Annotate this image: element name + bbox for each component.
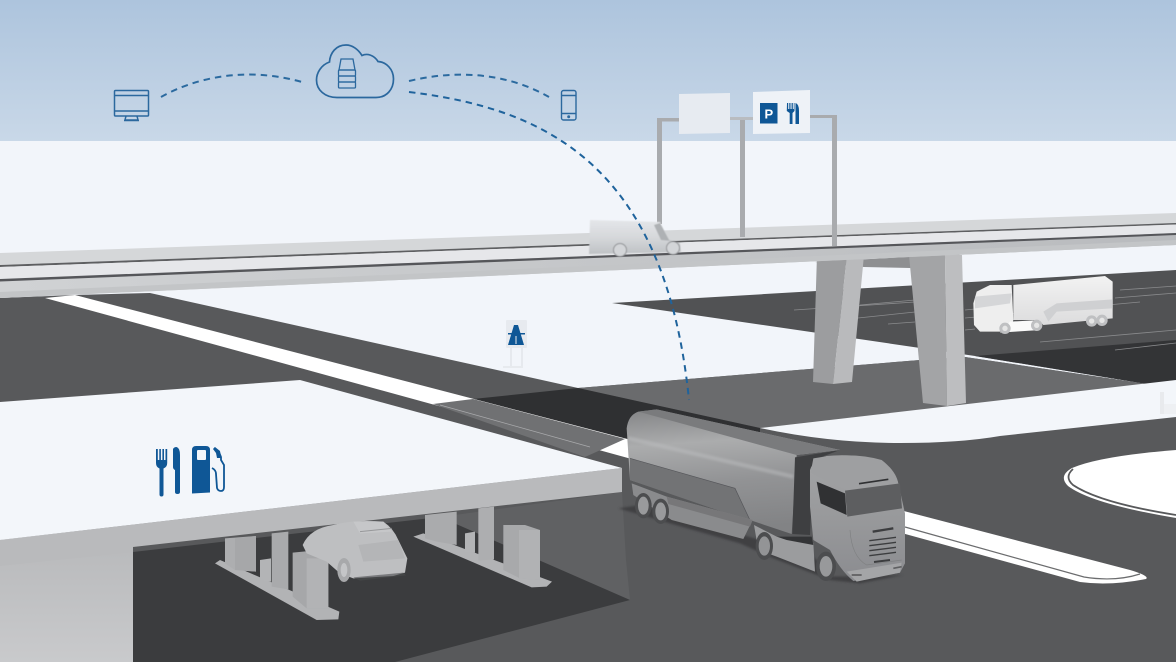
fuel pump bbox=[192, 446, 224, 494]
drive wheel bbox=[756, 532, 773, 560]
service station canopy bbox=[0, 380, 630, 662]
under-bridge beam bbox=[815, 254, 962, 268]
rear wheels bbox=[635, 493, 669, 524]
very dark shadow section bbox=[473, 388, 760, 474]
trailer bbox=[627, 409, 840, 534]
white island right bbox=[1064, 450, 1176, 518]
area under canopy beyond pad bbox=[440, 492, 630, 600]
icon: cloud with server bbox=[316, 45, 394, 98]
knife bbox=[173, 447, 180, 494]
trailer skirt bbox=[632, 483, 753, 539]
posts bbox=[657, 115, 837, 246]
white lane median bbox=[45, 295, 1147, 583]
canopy fascia bbox=[0, 468, 622, 566]
far truck bbox=[973, 276, 1113, 334]
gantry sign structure bbox=[657, 90, 837, 246]
windshield bbox=[845, 483, 902, 517]
white island upper right bbox=[760, 380, 1176, 443]
left wall bbox=[0, 525, 133, 662]
icon: computer monitor bbox=[114, 90, 148, 120]
main truck bbox=[618, 409, 905, 583]
side window bbox=[817, 482, 847, 515]
far parking road bbox=[612, 270, 1176, 384]
dark forecourt pad bbox=[133, 517, 630, 662]
server stack bbox=[338, 59, 356, 88]
icon: fork, knife and fuel pump bbox=[156, 446, 224, 496]
small post object bbox=[1160, 392, 1176, 414]
deck bbox=[0, 222, 1176, 298]
overpass bridge bbox=[0, 213, 1176, 298]
fuel island left bbox=[215, 532, 339, 620]
canopy roof bbox=[0, 380, 622, 540]
motorway road sign bbox=[503, 320, 527, 367]
pier 2 bbox=[909, 255, 966, 406]
parking and restaurant sign bbox=[753, 90, 810, 134]
cab bbox=[810, 455, 905, 582]
blank sign bbox=[679, 93, 730, 134]
icon: smartphone bbox=[562, 90, 576, 120]
dashed link: cloud to phone bbox=[409, 75, 549, 97]
sky bbox=[0, 0, 1176, 142]
parking symbol: P bbox=[764, 106, 773, 122]
ground bbox=[0, 141, 1176, 662]
cab gap bbox=[792, 450, 840, 535]
guard rail lower bbox=[0, 224, 1176, 279]
van on bridge bbox=[589, 220, 681, 256]
pier 1 bbox=[813, 255, 864, 384]
guard rail upper bbox=[0, 213, 1176, 265]
main road surface bbox=[0, 293, 1176, 662]
front wheel bbox=[816, 552, 836, 581]
fork bbox=[156, 449, 167, 496]
visor slot bbox=[859, 479, 888, 484]
dashed link: cloud to truck bbox=[409, 92, 689, 400]
road shadow under truck bbox=[618, 505, 903, 583]
chassis bbox=[754, 525, 815, 572]
bridge shadow on road bbox=[578, 357, 1147, 428]
grille bbox=[869, 528, 896, 562]
car at fuel station bbox=[303, 521, 407, 582]
fuel island right bbox=[413, 507, 552, 587]
fork and knife symbol bbox=[787, 103, 799, 124]
dashed link: monitor to cloud bbox=[161, 75, 302, 97]
